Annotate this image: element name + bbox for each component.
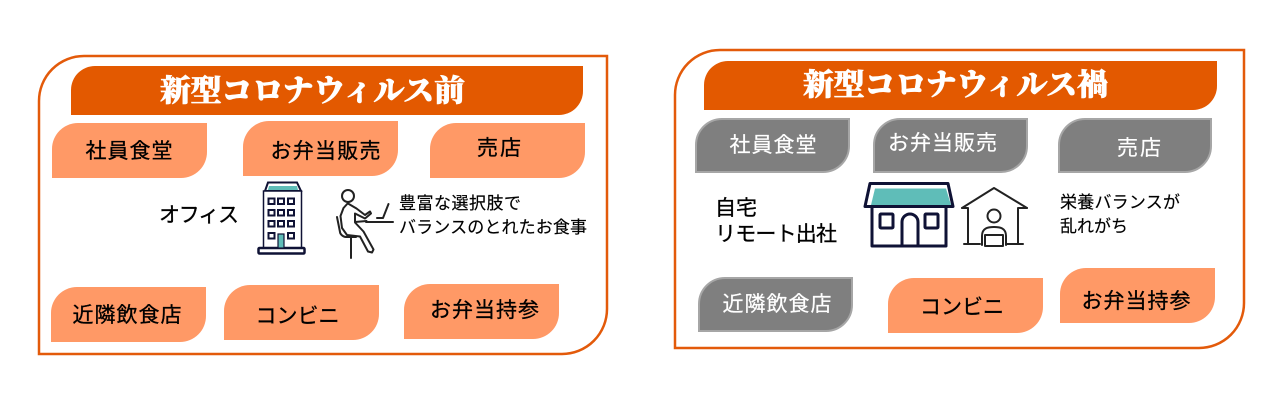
text: rich choices: バランスのとれたお食事 xyxy=(399,218,587,237)
option: nearby restaurants xyxy=(51,287,206,342)
option: bring boxed lunch xyxy=(404,284,559,339)
heading: during COVID: 新型コロナウィルス禍 xyxy=(803,68,1108,102)
label: office: オフィス xyxy=(159,204,239,227)
icon: person working at home xyxy=(962,188,1027,246)
text: rich choices: 豊富な選択肢で xyxy=(399,194,521,213)
label: home remote work: リモート出社 xyxy=(715,223,837,246)
option: staff cafeteria: 社員食堂 xyxy=(86,140,172,163)
option: convenience store xyxy=(888,278,1043,333)
option: boxed lunch sales xyxy=(243,121,398,176)
option: nearby restaurants: 近隣飲食店 xyxy=(72,304,182,327)
option: convenience store xyxy=(224,285,379,340)
icon: person at laptop xyxy=(337,190,393,258)
option: bring boxed lunch: お弁当持参 xyxy=(1082,290,1190,313)
option: boxed lunch sales (unavailable) xyxy=(874,119,1027,172)
panel outline xyxy=(675,50,1244,348)
option: bring boxed lunch: お弁当持参 xyxy=(430,299,539,322)
panel: before COVID xyxy=(39,56,607,354)
option: shop xyxy=(430,123,585,178)
option: staff cafeteria (unavailable) xyxy=(696,119,849,172)
panel: during COVID xyxy=(675,50,1244,348)
panel outline xyxy=(39,56,607,354)
option: bring boxed lunch xyxy=(1060,268,1215,323)
option: convenience store: コンビニ xyxy=(256,305,340,328)
label: home remote work: 自宅 xyxy=(715,197,757,220)
text: nutrition imbalance: 栄養バランスが xyxy=(1060,193,1180,212)
option: boxed lunch sales: お弁当販売 xyxy=(270,140,380,163)
option: boxed lunch sales (unavailable): お弁当販売 xyxy=(888,132,997,155)
icon: house xyxy=(865,184,953,246)
heading: before COVID: 新型コロナウィルス前 xyxy=(160,75,465,108)
option: nearby restaurants (unavailable): 近隣飲食店 xyxy=(722,293,832,316)
option: shop (unavailable) xyxy=(1059,119,1211,172)
icon: office building xyxy=(258,182,304,254)
option: shop: 売店 xyxy=(477,137,521,160)
option: staff cafeteria xyxy=(52,123,207,178)
text: nutrition imbalance: 乱れがち xyxy=(1060,217,1128,236)
option: convenience store: コンビニ xyxy=(920,296,1004,319)
option: nearby restaurants (unavailable) xyxy=(699,278,852,331)
heading: during COVID xyxy=(704,61,1217,110)
option: shop (unavailable): 売店 xyxy=(1117,137,1161,160)
option: staff cafeteria (unavailable): 社員食堂 xyxy=(730,134,816,157)
heading: before COVID xyxy=(71,66,583,115)
